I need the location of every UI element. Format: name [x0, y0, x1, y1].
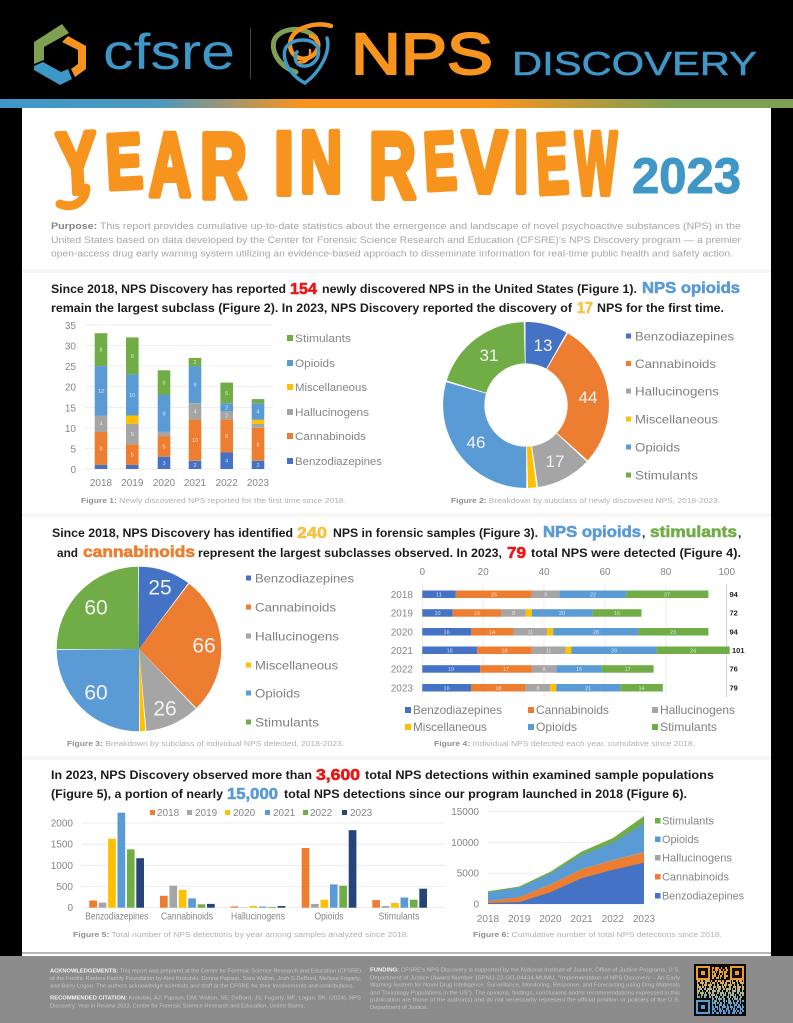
figure 1: stacked bar chart: 8	[256, 442, 260, 448]
figure 4: horizontal stacked bars: 10	[434, 611, 441, 617]
header banner	[34, 22, 757, 87]
figure 4: horizontal stacked bars: 28	[611, 648, 617, 654]
figure 4: horizontal stacked bars: 15	[576, 667, 582, 673]
figure 6: stacked area chart: 5000	[457, 869, 479, 880]
figure 1: stacked bar chart: 5	[131, 452, 134, 458]
section 2 headline: NPS opioids	[543, 524, 641, 541]
figure 1: stacked bar chart: 4	[193, 409, 197, 415]
figure 2 legend: Cannabinoids	[635, 357, 716, 371]
figure 3: pie chart: 66	[192, 634, 216, 658]
figure 6 legend: Stimulants	[662, 816, 714, 828]
figure 2 legend	[626, 330, 734, 482]
recommended citation: RECOMMENDED CITATION: Krotulski, AJ; Papsun, DM; Walton, SE; DeBord, JS; Fogarty, MF; Logan, BK. (2024). NPS	[50, 996, 362, 1002]
figure 4: horizontal stacked bars: 27	[664, 592, 670, 598]
figure 1: stacked bar chart: 35	[65, 321, 76, 332]
figure 1: stacked bar chart: 12	[98, 389, 104, 395]
title: Year in Review 2023: E	[422, 116, 458, 208]
figure 1 legend: Opioids	[295, 358, 336, 370]
figure 5 legend: 2021	[273, 808, 296, 819]
figure 3 legend: Opioids	[255, 686, 300, 700]
title: Year in Review 2023: I	[514, 114, 528, 211]
figure 2: donut chart: 31	[480, 346, 498, 365]
figure 1: stacked bar chart: 2023	[247, 478, 270, 489]
title: Year in Review 2023: W	[575, 113, 617, 213]
figure 4: horizontal stacked bars: 18	[495, 686, 501, 692]
section 3 headline: total NPS detections since our program launched in 2018 (Figure 6).	[284, 787, 687, 801]
funding: FUNDING: CFSRE's NPS Discovery is supported by the National Institute of Justice, Office of Justice Programs, U.S.	[370, 968, 680, 974]
figure 2: donut chart: 46	[467, 433, 485, 452]
figure 1: stacked bar chart: 3	[162, 461, 166, 467]
figure 5: clustered bar chart: Cannabinoids	[161, 912, 213, 922]
figure 5 legend: 2022	[310, 808, 333, 819]
figure 5 legend: 2020	[233, 808, 256, 819]
section 1 headline: remain the largest subclass (Figure 2). In 2023, NPS Discovery reported the discovery of	[51, 301, 573, 315]
figure 4: horizontal stacked bars: 8	[512, 611, 515, 617]
footer panel	[0, 956, 793, 1023]
figure 4: horizontal stacked bars: 21	[585, 686, 591, 692]
figure 4: horizontal stacked bars: 11	[436, 592, 442, 598]
figure 3 caption: Figure 3: Breakdown by subclass of individual NPS detected, 2018-2023.	[67, 741, 344, 748]
funding	[370, 968, 680, 1011]
figure 1: stacked bar chart: 5	[162, 444, 166, 450]
section 1 headline: 154	[290, 281, 317, 298]
section 1 headline: 17	[577, 300, 593, 317]
title: Year in Review 2023: A	[149, 116, 191, 216]
purpose text: Purpose: This report provides cumulative up-to-date statistics about the emergence and landscape of novel psychoactive substances (NPS) in the	[51, 220, 741, 231]
figure 4: horizontal stacked bars: 80	[660, 567, 672, 578]
figure 4 caption: Figure 4: Individual NPS detected each year, cumulative since 2018.	[434, 741, 695, 748]
section 1 headline: newly discovered NPS in the United States (Figure 1).	[322, 282, 637, 296]
figure 4: horizontal stacked bars: 20	[478, 567, 489, 578]
figure 5: clustered bar chart: Hallucinogens	[231, 912, 285, 922]
QR code	[694, 964, 746, 1016]
section 2 headline: ,	[738, 526, 741, 540]
figure 3: pie chart: 60	[84, 596, 108, 620]
figure 1: stacked bar chart: 9	[131, 354, 134, 360]
figure 1: stacked bar chart: 2019	[121, 478, 144, 489]
figure 4: horizontal stacked bars: 16	[614, 611, 620, 617]
figure 4: horizontal stacked bars: 94	[730, 627, 739, 636]
title: Year in Review 2023: V	[462, 114, 507, 211]
figure 4: horizontal stacked bars: 28	[593, 630, 599, 636]
figure 4: horizontal stacked bars: 2019	[391, 609, 413, 620]
figure 6: stacked area chart: 15000	[451, 807, 479, 818]
figure 1: stacked bar chart	[65, 321, 383, 505]
figure 5: clustered bar chart: 1500	[51, 840, 73, 851]
title: Year in Review 2023: I	[274, 113, 294, 213]
section 3 headline: (Figure 5), a portion of nearly	[51, 787, 223, 801]
figure 3: pie chart: 60	[84, 682, 108, 704]
logo: cfsre: cfsre	[103, 24, 235, 80]
figure 4: horizontal stacked bars: 25	[491, 592, 497, 598]
figure 6: stacked area chart: 2023	[633, 914, 656, 925]
figure 5 legend: 2019	[195, 808, 218, 819]
figure 1: stacked bar chart: 2	[225, 414, 228, 420]
figure 4: horizontal stacked bars: 11	[528, 630, 533, 636]
figure 4 legend: Hallucinogens	[660, 703, 735, 717]
figure 1: stacked bar chart: 4	[256, 409, 260, 415]
figure 3 legend: Stimulants	[255, 716, 319, 730]
figure 4: horizontal stacked bars: 40	[538, 567, 550, 578]
figure 1: stacked bar chart: 5	[131, 432, 134, 438]
section 1 headline	[51, 280, 740, 317]
figure 4: horizontal stacked bars	[391, 567, 745, 748]
figure 1: stacked bar chart: 6	[162, 381, 166, 387]
figure 4: horizontal stacked bars: 16	[444, 630, 450, 636]
section 2 headline: ,	[642, 526, 645, 540]
figure 4: horizontal stacked bars: 79	[730, 683, 738, 692]
figure 1: stacked bar chart: 8	[99, 446, 103, 452]
figure 2 legend: Stimulants	[635, 468, 698, 482]
figure 6 caption: Figure 6: Cumulative number of total NPS detections since 2018.	[473, 932, 722, 939]
figure 6 legend: Opioids	[662, 834, 699, 846]
figure 4: horizontal stacked bars: 9	[544, 592, 547, 598]
title: Year in Review 2023: N	[300, 114, 342, 211]
figure 5: clustered bar chart: Opioids	[314, 912, 344, 922]
figure 1 legend: Benzodiazepines	[295, 456, 383, 468]
figure 3 legend	[246, 572, 354, 730]
figure 1: stacked bar chart: 30	[65, 342, 76, 353]
figure 4: horizontal stacked bars: 2018	[391, 590, 413, 601]
figure 4: horizontal stacked bars: 2022	[391, 665, 413, 676]
figure 1: stacked bar chart: 2018	[90, 478, 113, 489]
figure 1: stacked bar chart: 2	[225, 405, 228, 411]
section 2 headline: stimulants	[650, 524, 737, 541]
figure 5: clustered bar chart	[51, 808, 445, 939]
figure 5 legend: 2018	[157, 808, 180, 819]
figure 1: stacked bar chart: 2022	[216, 478, 238, 489]
figure 4: horizontal stacked bars: 72	[730, 609, 738, 618]
figure 4 legend: Opioids	[536, 720, 577, 734]
title: Year in Review 2023: 2023	[632, 148, 741, 204]
figure 4: horizontal stacked bars: 8	[536, 686, 540, 692]
figure 2: donut chart	[451, 330, 734, 505]
figure 1: stacked bar chart: 15	[65, 403, 76, 414]
figure 3 legend: Hallucinogens	[255, 630, 339, 644]
figure 2 legend: Miscellaneous	[635, 412, 718, 426]
section 2 headline: total NPS were detected (Figure 4).	[531, 546, 741, 560]
logo: NPS Discovery: DISCOVERY	[512, 45, 757, 82]
figure 3 legend: Miscellaneous	[255, 658, 338, 672]
figure 3: pie chart: 26	[153, 698, 177, 720]
figure 6: stacked area chart: 2020	[539, 914, 562, 925]
purpose text: open-access drug early warning system utilizing an evidence-based approach to disseminate information for real-time public health and safety action.	[51, 248, 733, 258]
figure 6: stacked area chart: 0	[473, 900, 479, 910]
figure 4: horizontal stacked bars: 24	[690, 648, 696, 654]
funding: Warning System for Novel Drug Intelligence, Surveillance, Monitoring, Response, and Forecasting using Drug Materials	[370, 983, 680, 989]
section 2 headline	[52, 524, 741, 562]
figure 3 legend: Benzodiazepines	[255, 572, 354, 586]
funding: and Toxicology Populations in the US"). The opinions, findings, conclusions and/or recommendations expressed in this	[370, 991, 680, 997]
section 3 headline: total NPS detections within examined sample populations	[365, 768, 714, 782]
figure 5: clustered bar chart: 0	[67, 903, 73, 914]
section 1 headline: NPS for the first time.	[597, 301, 724, 315]
section 3 headline: 3,600	[316, 767, 360, 784]
figure 1: stacked bar chart: 2	[193, 360, 197, 366]
figure 1: stacked bar chart: 2	[193, 463, 197, 469]
purpose text: United States based on data developed by the Center for Forensic Science Research and Education (CFSRE)'s NPS Discovery program — a premier	[51, 234, 741, 245]
purpose text	[51, 220, 741, 258]
figure 5 legend	[150, 808, 373, 819]
figure 4: horizontal stacked bars: 100	[718, 567, 735, 578]
figure 4: horizontal stacked bars: 101	[732, 646, 745, 655]
section 2 headline: represent the largest subclasses observed. In 2023,	[198, 546, 502, 560]
figure 6: stacked area chart: 2018	[477, 914, 500, 925]
figure 5: clustered bar chart: Benzodiazepines	[85, 912, 148, 922]
figure 4: horizontal stacked bars: 19	[448, 667, 454, 673]
logo: NPS Discovery: NPS	[351, 22, 493, 87]
figure 1: stacked bar chart: 9	[162, 411, 166, 417]
funding: publication are those of the author(s) and do not necessarily represent the official position or policies of the U.S.	[370, 998, 680, 1004]
figure 4: horizontal stacked bars: 14	[489, 630, 495, 636]
figure 4: horizontal stacked bars: 17	[625, 667, 631, 673]
figure 4 legend	[405, 703, 735, 734]
figure 1: stacked bar chart: 9	[193, 383, 197, 389]
figure 1 legend	[287, 333, 383, 468]
title: Year in Review 2023	[54, 113, 741, 218]
figure 1: stacked bar chart: 8	[99, 348, 103, 354]
figure 1: stacked bar chart: 4	[99, 422, 103, 428]
figure 6 legend: Cannabinoids	[662, 872, 729, 884]
figure 2: donut chart: 44	[579, 388, 597, 407]
acknowledgements: ACKNOWLEDGEMENTS: This report was prepared at the Center for Forensic Science Research and Education (CFSRE)	[50, 968, 361, 974]
figure 3: pie chart	[67, 572, 354, 748]
title: Year in Review 2023: Y	[54, 114, 99, 213]
figure 2 legend: Hallucinogens	[635, 384, 719, 398]
recommended citation	[50, 996, 362, 1010]
figure 4: horizontal stacked bars: 16	[444, 686, 450, 692]
figure 2: donut chart: 13	[534, 336, 552, 355]
figure 4: horizontal stacked bars: 76	[730, 665, 738, 674]
section 1 headline: NPS opioids	[642, 280, 740, 297]
figure 5: clustered bar chart: 500	[56, 882, 73, 893]
title: Year in Review 2023: R	[200, 114, 247, 218]
funding: Department of Justice (Award Number 15PNIJ-22-GG-04434-MUMU, "Implementation of NPS Discovery – An Early	[370, 975, 680, 981]
figure 6 legend: Benzodiazepines	[662, 890, 744, 902]
section 2 headline: cannabinoids	[83, 544, 195, 561]
logo: NPS Discovery	[273, 22, 757, 87]
figure 1: stacked bar chart: 4	[225, 459, 228, 465]
figure 4 legend: Benzodiazepines	[413, 703, 502, 717]
title: Year in Review 2023: E	[104, 118, 144, 206]
section 1 headline: Since 2018, NPS Discovery has reported	[51, 282, 286, 296]
recommended citation: Discovery: Year in Review 2023, Center for Forensic Science Research and Education, United States.	[50, 1004, 305, 1010]
figure 4: horizontal stacked bars: 17	[503, 667, 509, 673]
figure 2: donut chart: 17	[546, 452, 564, 471]
acknowledgements: at the Fredric Rieders Family Foundation by Alex Krotulski, Donna Papsun, Sara Walton, Josh S DeBord, Melissa Fogarty,	[50, 976, 361, 982]
acknowledgements: and Barry Logan. The authors acknowledge scientists and staff at the CFSRE for their involvements and contributions.	[50, 984, 354, 990]
figure 1: stacked bar chart: 2021	[184, 478, 207, 489]
section 3 headline: In 2023, NPS Discovery observed more than	[51, 768, 312, 782]
figure 4: horizontal stacked bars: 2021	[391, 646, 413, 657]
figure 1 legend: Stimulants	[295, 333, 352, 345]
figure 1: stacked bar chart: 2	[256, 463, 260, 469]
figure 6: stacked area chart	[451, 807, 744, 939]
section 3 headline: 15,000	[227, 786, 278, 803]
title: Year in Review 2023: R	[369, 113, 416, 218]
section 2 headline: 240	[297, 525, 327, 542]
section 2 headline: and	[57, 546, 78, 560]
figure 4: horizontal stacked bars: 18	[501, 648, 508, 654]
figure 4 legend: Miscellaneous	[413, 720, 487, 734]
figure 4: horizontal stacked bars: 22	[590, 592, 596, 598]
figure 1: stacked bar chart: 0	[70, 465, 76, 476]
figure 2 legend: Benzodiazepines	[635, 330, 734, 344]
figure 5: clustered bar chart: Stimulants	[378, 912, 420, 922]
figure 6: stacked area chart: 2021	[570, 914, 593, 925]
figure 4: horizontal stacked bars: 11	[546, 648, 551, 654]
figure 1: stacked bar chart: 2020	[153, 478, 176, 489]
figure 4: horizontal stacked bars: 2023	[391, 683, 413, 694]
figure 1: stacked bar chart: 5	[225, 391, 228, 397]
section 2 headline: NPS in forensic samples (Figure 3).	[333, 526, 538, 540]
figure 4: horizontal stacked bars: 2020	[391, 627, 413, 638]
figure 1: stacked bar chart: 20	[65, 383, 76, 394]
figure 6 legend	[655, 816, 744, 902]
section 2 headline: Since 2018, NPS Discovery has identified	[52, 526, 293, 540]
figure 5: clustered bar chart: 1000	[51, 861, 73, 872]
figure 1 legend: Cannabinoids	[295, 431, 367, 443]
section 3 headline	[51, 767, 714, 803]
logo: cfsre	[34, 24, 235, 85]
figure 6: stacked area chart: 2019	[508, 914, 531, 925]
figure 5 legend: 2023	[350, 808, 373, 819]
figure 1: stacked bar chart: 10	[65, 424, 76, 435]
figure 6: stacked area chart: 10000	[451, 838, 479, 849]
figure 4: horizontal stacked bars: 16	[474, 611, 480, 617]
figure 4: horizontal stacked bars: 18	[447, 648, 453, 654]
figure 5: clustered bar chart: 2000	[51, 818, 73, 830]
figure 4: horizontal stacked bars: 60	[599, 567, 611, 578]
funding: Department of Justice.	[370, 1005, 428, 1011]
figure 1 legend: Hallucinogens	[295, 407, 370, 419]
figure 1: stacked bar chart: 5	[70, 444, 76, 455]
figure 3: pie chart: 25	[148, 576, 172, 600]
figure 2 legend: Opioids	[635, 440, 680, 454]
figure 5 caption: Figure 5: Total number of NPS detections by year among samples analyzed since 2018.	[73, 932, 409, 939]
figure 1: stacked bar chart: 8	[225, 434, 228, 440]
figure 4: horizontal stacked bars: 8	[542, 667, 546, 673]
figure 1: stacked bar chart: 10	[129, 393, 135, 399]
figure 6: stacked area chart: 2022	[602, 914, 624, 925]
figure 1: stacked bar chart: 10	[192, 438, 198, 444]
figure 4: horizontal stacked bars: 14	[638, 686, 645, 692]
figure 4 legend: Cannabinoids	[536, 703, 609, 717]
figure 4: horizontal stacked bars: 94	[730, 590, 739, 599]
figure 6 legend: Hallucinogens	[662, 852, 732, 864]
figure 2 caption: Figure 2: Breakdown by subclass of newly discovered NPS, 2018-2023.	[451, 498, 720, 505]
figure 4 legend: Stimulants	[660, 720, 717, 734]
section 2 headline: 79	[507, 545, 526, 562]
figure 4: horizontal stacked bars: 0	[420, 567, 426, 578]
figure 4: horizontal stacked bars: 23	[670, 630, 676, 636]
figure 1 caption: Figure 1: Newly discovered NPS reported for the first time since 2018.	[81, 498, 346, 505]
figure 1 legend: Miscellaneous	[295, 382, 368, 394]
figure 1: stacked bar chart: 25	[65, 362, 76, 373]
acknowledgements	[50, 968, 361, 990]
title: Year in Review 2023: E	[534, 116, 571, 213]
figure 3 legend: Cannabinoids	[255, 600, 336, 614]
figure 4: horizontal stacked bars: 20	[559, 611, 565, 617]
